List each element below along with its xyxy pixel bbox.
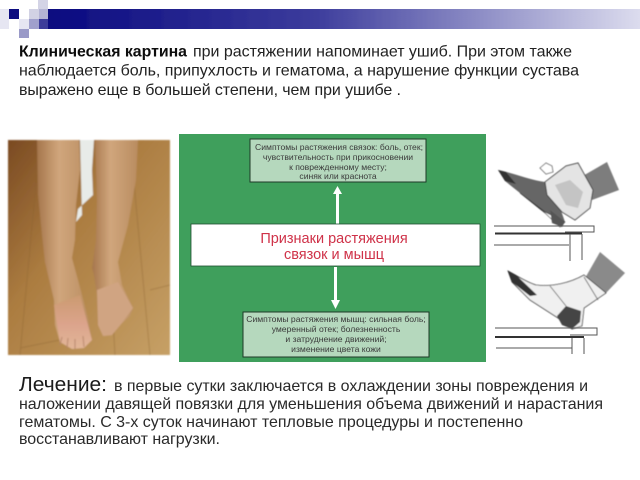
treatment text: Лечение: <box>19 374 107 396</box>
heading text: clinical picture: выражено еще в большей степени, чем при ушибе . <box>19 82 401 99</box>
heading text: clinical picture: наблюдается боль, припухлость и гематома, а нарушение функции сустава <box>19 62 579 80</box>
illustration: ice pack on foot <box>498 162 619 227</box>
arrow up <box>333 186 342 224</box>
box: muscle sprain symptoms <box>243 312 429 357</box>
photo: swollen ankle <box>8 140 170 355</box>
central box: signs of sprain: связок и мышц <box>284 247 384 263</box>
box: muscle sprain symptoms: умеренный отек; болезненность <box>272 324 401 334</box>
illustration: bandaged foot <box>508 252 625 329</box>
treatment text: гематомы. С 3-х суток начинают тепловые процедуры и постепенно <box>19 414 523 431</box>
box: muscle sprain symptoms: изменение цвета кожи <box>291 344 381 354</box>
central box: signs of sprain <box>191 224 480 266</box>
treatment text <box>19 374 603 448</box>
box: ligament sprain symptoms: Симптомы растяжения связок: боль, отек; <box>255 142 423 152</box>
arrow down <box>331 267 340 309</box>
illustration: table under first foot <box>494 226 594 261</box>
heading text: clinical picture <box>19 44 579 99</box>
green diagram background <box>179 134 486 362</box>
heading text: clinical picture: при растяжении напоминает ушиб. При этом также <box>193 44 572 60</box>
box: muscle sprain symptoms: и затруднение движений; <box>285 334 387 344</box>
box: ligament sprain symptoms: к поврежденному месту; <box>289 162 387 172</box>
header decoration: squares and gradient bar <box>0 0 640 38</box>
illustration: table under second foot <box>495 328 597 354</box>
treatment text: наложении давящей повязки для уменьшения объема движений и нарастания <box>19 396 603 413</box>
treatment text: в первые сутки заключается в охлаждении зоны повреждения и <box>114 378 588 395</box>
treatment text: восстанавливают нагрузки. <box>19 431 220 448</box>
box: ligament sprain symptoms: чувствительность при прикосновении <box>263 152 413 162</box>
heading text: clinical picture: Клиническая картина <box>19 44 187 60</box>
box: muscle sprain symptoms: Симптомы растяжения мышц: сильная боль; <box>246 314 426 324</box>
box: ligament sprain symptoms: синяк или краснота <box>299 171 377 181</box>
diagram: signs of sprain <box>179 134 486 362</box>
central box: signs of sprain: Признаки растяжения <box>260 231 408 247</box>
box: ligament sprain symptoms <box>250 139 426 182</box>
